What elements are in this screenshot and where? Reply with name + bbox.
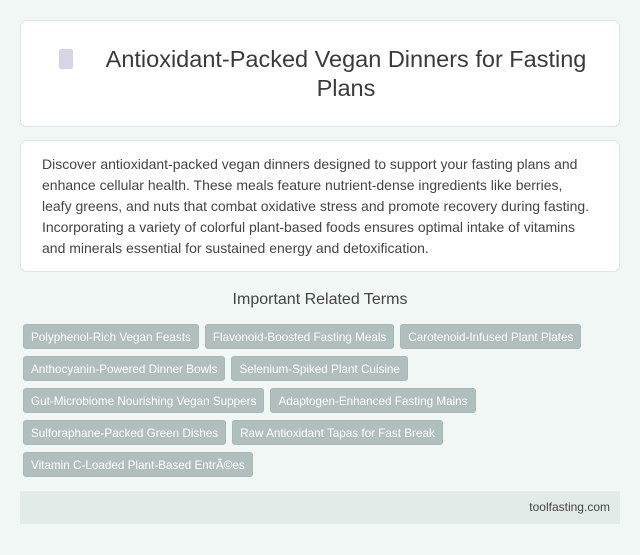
tags: Vitamin C-Loaded Plant-Based EntrÃ©es (31, 459, 245, 472)
tags: Anthocyanin-Powered Dinner Bowls (31, 363, 217, 376)
tags: Flavonoid-Boosted Fasting Meals (213, 331, 386, 344)
tags: Adaptogen-Enhanced Fasting Mains (278, 395, 468, 408)
footer (20, 491, 620, 524)
icon: document (59, 49, 73, 69)
tags: Polyphenol-Rich Vegan Feasts (31, 331, 191, 344)
title: Antioxidant-Packed Vegan Dinners for Fasting Plans (106, 46, 586, 101)
tags: Raw Antioxidant Tapas for Fast Break (240, 427, 435, 440)
related terms heading: Important Related Terms (233, 291, 407, 308)
description card (20, 140, 620, 272)
header card (20, 20, 620, 127)
tags (23, 324, 581, 477)
tags: Carotenoid-Infused Plant Plates (408, 331, 573, 344)
tags: Sulforaphane-Packed Green Dishes (31, 427, 218, 440)
tags: Selenium-Spiked Plant Cuisine (239, 363, 400, 376)
footer: toolfasting.com (529, 500, 610, 514)
description text: Discover antioxidant-packed vegan dinners designed to support your fasting plans and enhance cellular health. These meals feature nutrient-dense ingredients like berries, leafy greens, and nuts that combat oxidative stress and promote recovery during fasting. Incorporating a variety of colorful plant-based foods ensures optimal intake of vitamins and minerals essential for sustained energy and detoxification. (42, 156, 589, 256)
tags: Gut-Microbiome Nourishing Vegan Suppers (31, 395, 256, 408)
